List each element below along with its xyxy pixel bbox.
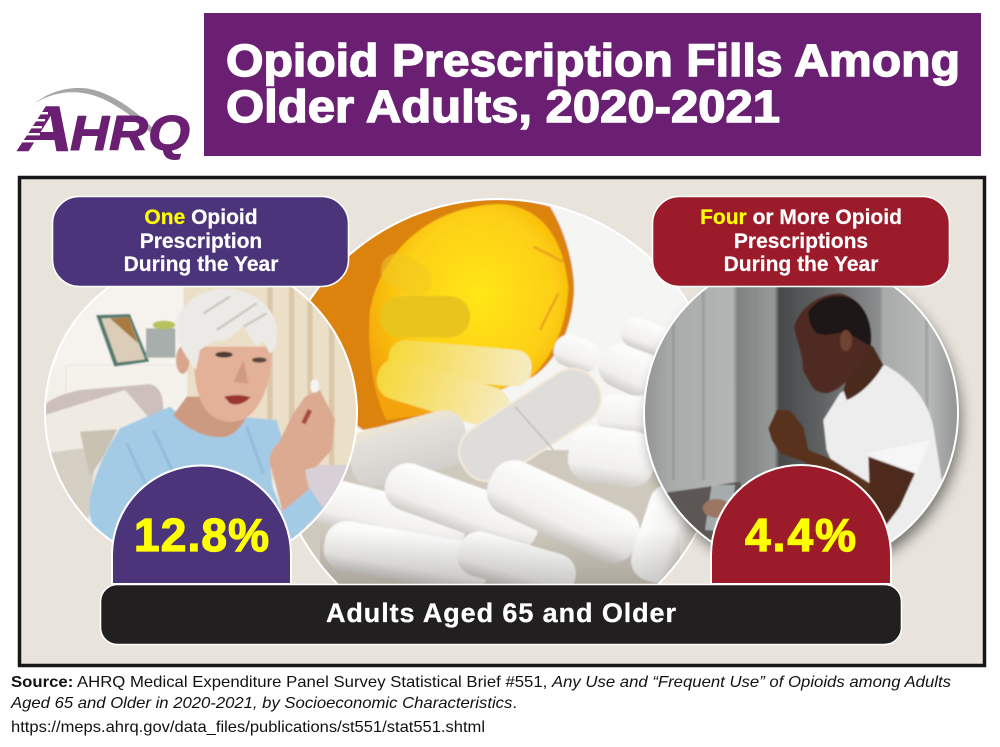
title text: Opioid Prescription Fills Among xyxy=(226,35,960,86)
hand with pill xyxy=(270,379,335,515)
glass and hand xyxy=(703,485,735,532)
neck xyxy=(173,397,247,437)
population bar text: Adults Aged 65 and Older xyxy=(326,598,676,628)
photo circle: older woman holding pill xyxy=(44,287,358,542)
stat: 12.8%: 12.8% xyxy=(134,509,269,561)
sofa xyxy=(46,384,347,530)
left label text: During the Year xyxy=(124,253,278,276)
head xyxy=(794,293,871,393)
shirt xyxy=(823,365,942,547)
right label pill xyxy=(652,196,950,286)
right label text: During the Year xyxy=(724,253,878,276)
left label pill xyxy=(52,196,348,286)
dresser xyxy=(66,364,188,406)
picture frame xyxy=(96,314,149,367)
right label text xyxy=(700,206,902,276)
bottle xyxy=(280,199,574,430)
logo stripes xyxy=(16,112,48,142)
sweater cuff xyxy=(280,488,323,542)
population bar xyxy=(100,584,902,644)
logo letter A: A xyxy=(17,93,73,165)
hair xyxy=(808,296,871,347)
main panel xyxy=(20,178,984,666)
source note: https://meps.ahrq.gov/data_files/publications/st551/stat551.shtml xyxy=(11,719,485,736)
right percentage dome xyxy=(711,465,891,584)
curtain xyxy=(183,287,356,480)
potted plant xyxy=(146,321,175,358)
face xyxy=(193,347,272,422)
sweater xyxy=(88,406,291,540)
upper arm xyxy=(868,457,915,527)
logo arc xyxy=(35,88,160,136)
logo: AHRQ xyxy=(16,88,190,165)
front pills xyxy=(297,359,701,603)
source note: Source: AHRQ Medical Expenditure Panel Survey Statistical Brief #551, Any Use and “Frequent Use” of Opioids among Adults xyxy=(11,674,951,691)
back pills xyxy=(552,334,657,488)
neck xyxy=(843,340,883,400)
facial features xyxy=(215,352,267,404)
capsules inside bottle xyxy=(372,247,533,433)
title text: Older Adults, 2020-2021 xyxy=(226,81,780,132)
left label text: Prescription xyxy=(140,230,262,253)
hair xyxy=(176,288,277,370)
raised hand and forearm xyxy=(768,410,872,497)
stat: 4.4%: 4.4% xyxy=(745,509,856,561)
right label text: Prescriptions xyxy=(734,230,868,253)
photo circle: man holding pill xyxy=(639,287,971,562)
left label text xyxy=(124,206,278,276)
right label text: Four or More Opioid xyxy=(700,206,902,229)
source note: Aged 65 and Older in 2020-2021, by Socioeconomic Characteristics . xyxy=(10,695,517,712)
source note xyxy=(10,674,951,736)
bed xyxy=(666,481,742,540)
title text xyxy=(226,35,960,132)
photo circle: pills and amber bottle xyxy=(300,198,698,584)
logo letters HRQ: HRQ xyxy=(70,107,190,161)
ear xyxy=(840,330,852,351)
left label text: One Opioid xyxy=(144,206,258,229)
left percentage dome xyxy=(112,465,291,584)
title banner xyxy=(204,13,981,156)
